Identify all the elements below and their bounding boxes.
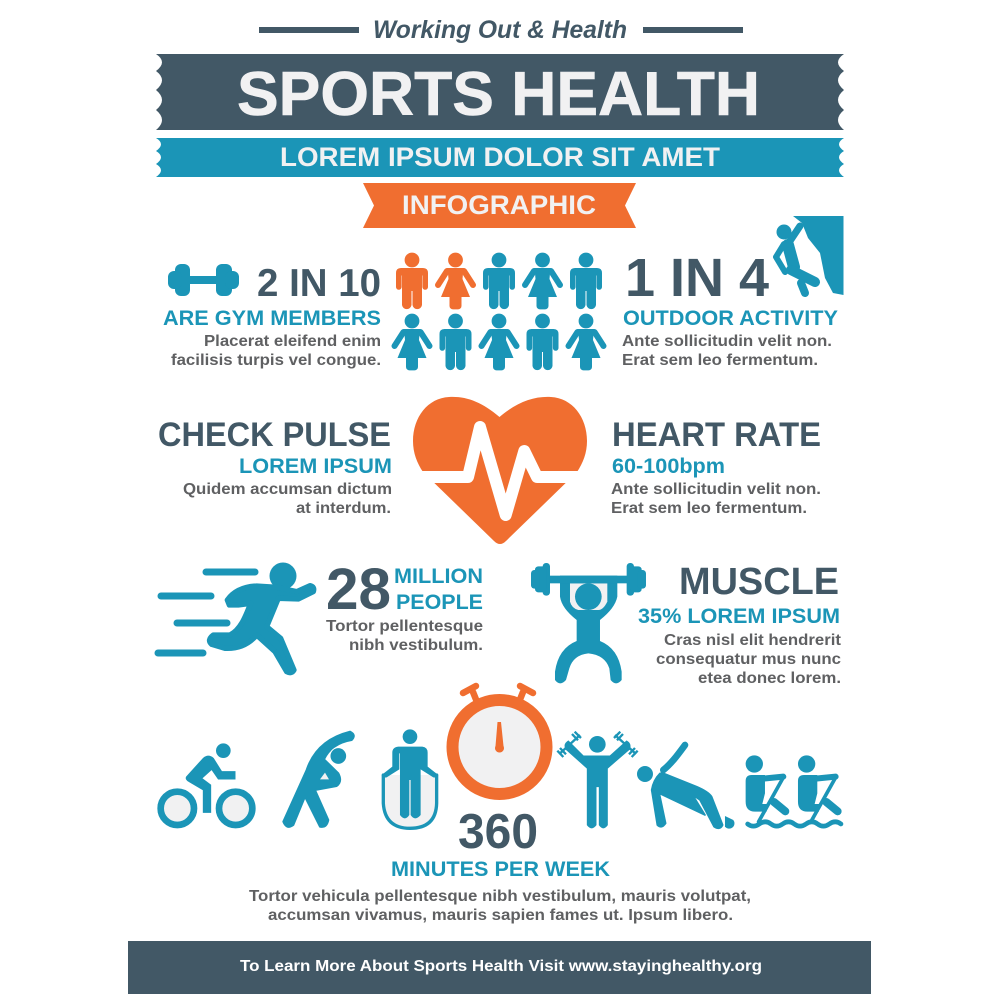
heading: working out and health <box>259 16 743 44</box>
text block: people: nibh vestibulum. <box>349 637 483 654</box>
icon: stopwatch <box>452 686 546 794</box>
title banner <box>156 54 844 130</box>
icon: side stretch <box>283 732 354 827</box>
infographic ribbon: INFOGRAPHIC <box>402 190 596 220</box>
label: million people: MILLION <box>394 565 483 588</box>
text block: pulse: at interdum. <box>296 500 391 517</box>
text block: gym <box>171 333 381 369</box>
text block: muscle: consequatur mus nunc <box>656 651 841 668</box>
heading: check pulse: CHECK PULSE <box>158 416 391 454</box>
text block: muscle <box>656 632 842 687</box>
stat: 1 in 4: 1 IN 4 <box>625 248 769 308</box>
heading: working out and health: Working Out & Health <box>373 16 627 44</box>
stat: 2 in 10: 2 IN 10 <box>257 262 381 305</box>
panel: check pulse <box>158 416 392 517</box>
text block: muscle: Cras nisl elit hendrerit <box>664 632 842 649</box>
label: million people: PEOPLE <box>396 591 483 614</box>
icon: jump rope <box>382 729 438 828</box>
icon: heart with pulse <box>413 397 587 544</box>
text block: pulse: Quidem accumsan dictum <box>183 481 392 498</box>
text block: muscle: etea donec lorem. <box>698 670 841 687</box>
text block: gym: Placerat eleifend enim <box>204 333 381 350</box>
stat: 360 minutes: 360 <box>458 805 538 859</box>
text block: bottom <box>249 888 751 924</box>
text block: heart rate: Ante sollicitudin velit non. <box>611 481 821 498</box>
panel: 28 million people <box>326 557 483 654</box>
subtitle banner: LOREM IPSUM DOLOR SIT AMET <box>280 142 721 172</box>
panel: outdoor activity <box>622 216 844 369</box>
text block: heart rate: Erat sem leo fermentum. <box>611 500 807 517</box>
panel: gym members <box>163 262 381 369</box>
text block: outdoor <box>622 333 832 369</box>
subtitle banner <box>156 138 844 177</box>
icon: dumbbell <box>168 264 239 296</box>
stat: 28: 28 <box>326 557 391 622</box>
pictogram: people 2 in 10 <box>394 253 604 370</box>
subheading: minutes per week: MINUTES PER WEEK <box>391 858 610 881</box>
text block: outdoor: Ante sollicitudin velit non. <box>622 333 832 350</box>
text block: outdoor: Erat sem leo fermentum. <box>622 352 818 369</box>
icon: rowers <box>746 755 841 826</box>
subheading: 35% lorem ipsum: 35% LOREM IPSUM <box>638 605 840 628</box>
title banner: SPORTS HEALTH <box>237 60 760 129</box>
footer bar: To Learn More About Sports Health Visit www.stayinghealthy.org <box>240 958 762 975</box>
text block: gym: facilisis turpis vel congue. <box>171 352 381 369</box>
icon: climber <box>776 216 844 295</box>
subheading: 60-100bpm: 60-100bpm <box>612 455 725 478</box>
heading: muscle: MUSCLE <box>679 561 839 603</box>
icon: cyclist <box>161 743 252 825</box>
icon: side plank <box>637 745 734 829</box>
infographic ribbon <box>363 183 636 228</box>
icon: runner <box>158 562 314 673</box>
footer bar <box>128 941 871 994</box>
text block: bottom: Tortor vehicula pellentesque nibh vestibulum, mauris volutpat, <box>249 888 751 905</box>
icon: weightlifter <box>531 563 646 683</box>
text block: people: Tortor pellentesque <box>326 618 483 635</box>
subheading: are gym members: ARE GYM MEMBERS <box>163 307 381 330</box>
icon: dumbbell figure <box>557 732 638 828</box>
heading: heart rate: HEART RATE <box>612 416 821 454</box>
text block: heart rate <box>611 481 821 517</box>
text block: pulse <box>183 481 392 517</box>
subheading: lorem ipsum: LOREM IPSUM <box>239 455 392 478</box>
panel: heart rate <box>611 416 821 517</box>
panel: muscle <box>638 561 842 687</box>
text block: bottom: accumsan vivamus, mauris sapien fames ut. Ipsum libero. <box>268 907 733 924</box>
subheading: outdoor activity: OUTDOOR ACTIVITY <box>623 307 838 330</box>
label: million people <box>394 565 483 614</box>
text block: people <box>326 618 483 654</box>
